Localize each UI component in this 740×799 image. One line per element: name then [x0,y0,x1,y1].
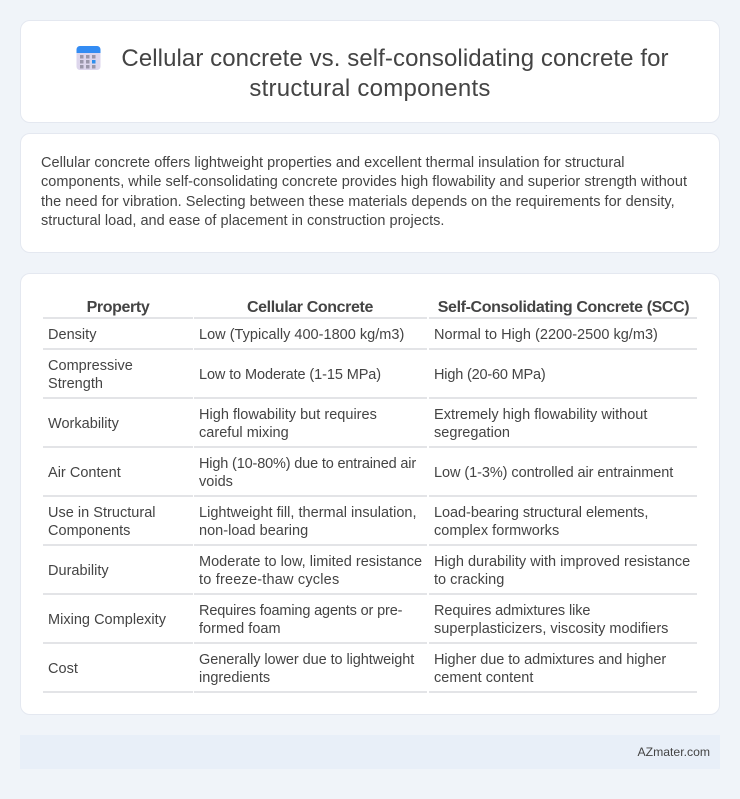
comparison table panel: careful mixing [199,425,289,441]
comparison table panel: Low (1-3%) controlled air entrainment [434,465,673,481]
row: use in structural components: Components [48,523,130,539]
comparison table panel: cement content [434,670,533,686]
comparison table panel: Requires foaming agents or pre- [199,603,402,619]
comparison table panel: Normal to High (2200-2500 kg/m3) [434,327,658,343]
title: Cellular concrete vs. self-consolidating concrete for [121,45,669,72]
comparison table panel: segregation [434,425,510,441]
comparison table panel: Self-Consolidating Concrete (SCC) [438,299,689,316]
comparison table panel: High flowability but requires [199,407,377,423]
comparison table panel: Moderate to low, limited resistance [199,554,422,570]
comparison table panel: High (20-60 MPa) [434,367,546,383]
row: use in structural components [48,505,156,539]
footer bar [20,735,720,769]
row: workability: Workability [48,416,119,432]
comparison table panel: Higher due to admixtures and higher [434,652,666,668]
comparison table panel: Generally lower due to lightweight [199,652,414,668]
footer brand: AZmater.com [638,745,710,759]
row: compressive strength: Compressive [48,358,133,374]
header panel [20,20,720,123]
comparison table panel: Lightweight fill, thermal insulation, [199,505,417,521]
row: density: Density [48,327,96,343]
title: structural components [249,75,491,102]
row: use in structural components: Use in Structural [48,505,156,521]
summary text [41,155,687,229]
comparison table panel: formed foam [199,621,281,637]
comparison table panel: Load-bearing structural elements, [434,505,648,521]
row: durability: Durability [48,563,109,579]
row: mixing complexity: Mixing Complexity [48,612,166,628]
table header: Property [87,299,149,316]
comparison table panel [20,273,720,715]
comparison table panel: Cellular Concrete [247,299,373,316]
comparison table panel: to cracking [434,572,504,588]
comparison table panel: High durability with improved resistance [434,554,690,570]
title [121,45,669,102]
comparison table panel: voids [199,474,233,490]
row: compressive strength: Strength [48,376,103,392]
summary text: structural load, and ease of placement in construction projects. [41,213,444,229]
comparison table panel: non-load bearing [199,523,308,539]
comparison table panel: ingredients [199,670,270,686]
summary panel [20,133,720,253]
icon: calendar [76,46,100,70]
comparison table panel: Low to Moderate (1-15 MPa) [199,367,381,383]
summary text: components, while self-consolidating concrete provides high flowability and superior strength without [41,174,687,190]
row: compressive strength [48,358,133,392]
comparison table panel: Low (Typically 400-1800 kg/m3) [199,327,404,343]
summary text: Cellular concrete offers lightweight properties and excellent thermal insulation for structural [41,155,625,171]
comparison table panel: Requires admixtures like [434,603,590,619]
comparison table panel: superplasticizers, viscosity modifiers [434,621,668,637]
row: cost: Cost [48,661,78,677]
comparison table panel: to freeze-thaw cycles [199,572,339,588]
comparison table panel: Extremely high flowability without [434,407,647,423]
row: air content: Air Content [48,465,121,481]
summary text: the need for vibration. Selecting between these materials depends on the requirements for density, [41,194,675,210]
comparison table panel: complex formworks [434,523,559,539]
comparison table panel: High (10-80%) due to entrained air [199,456,416,472]
